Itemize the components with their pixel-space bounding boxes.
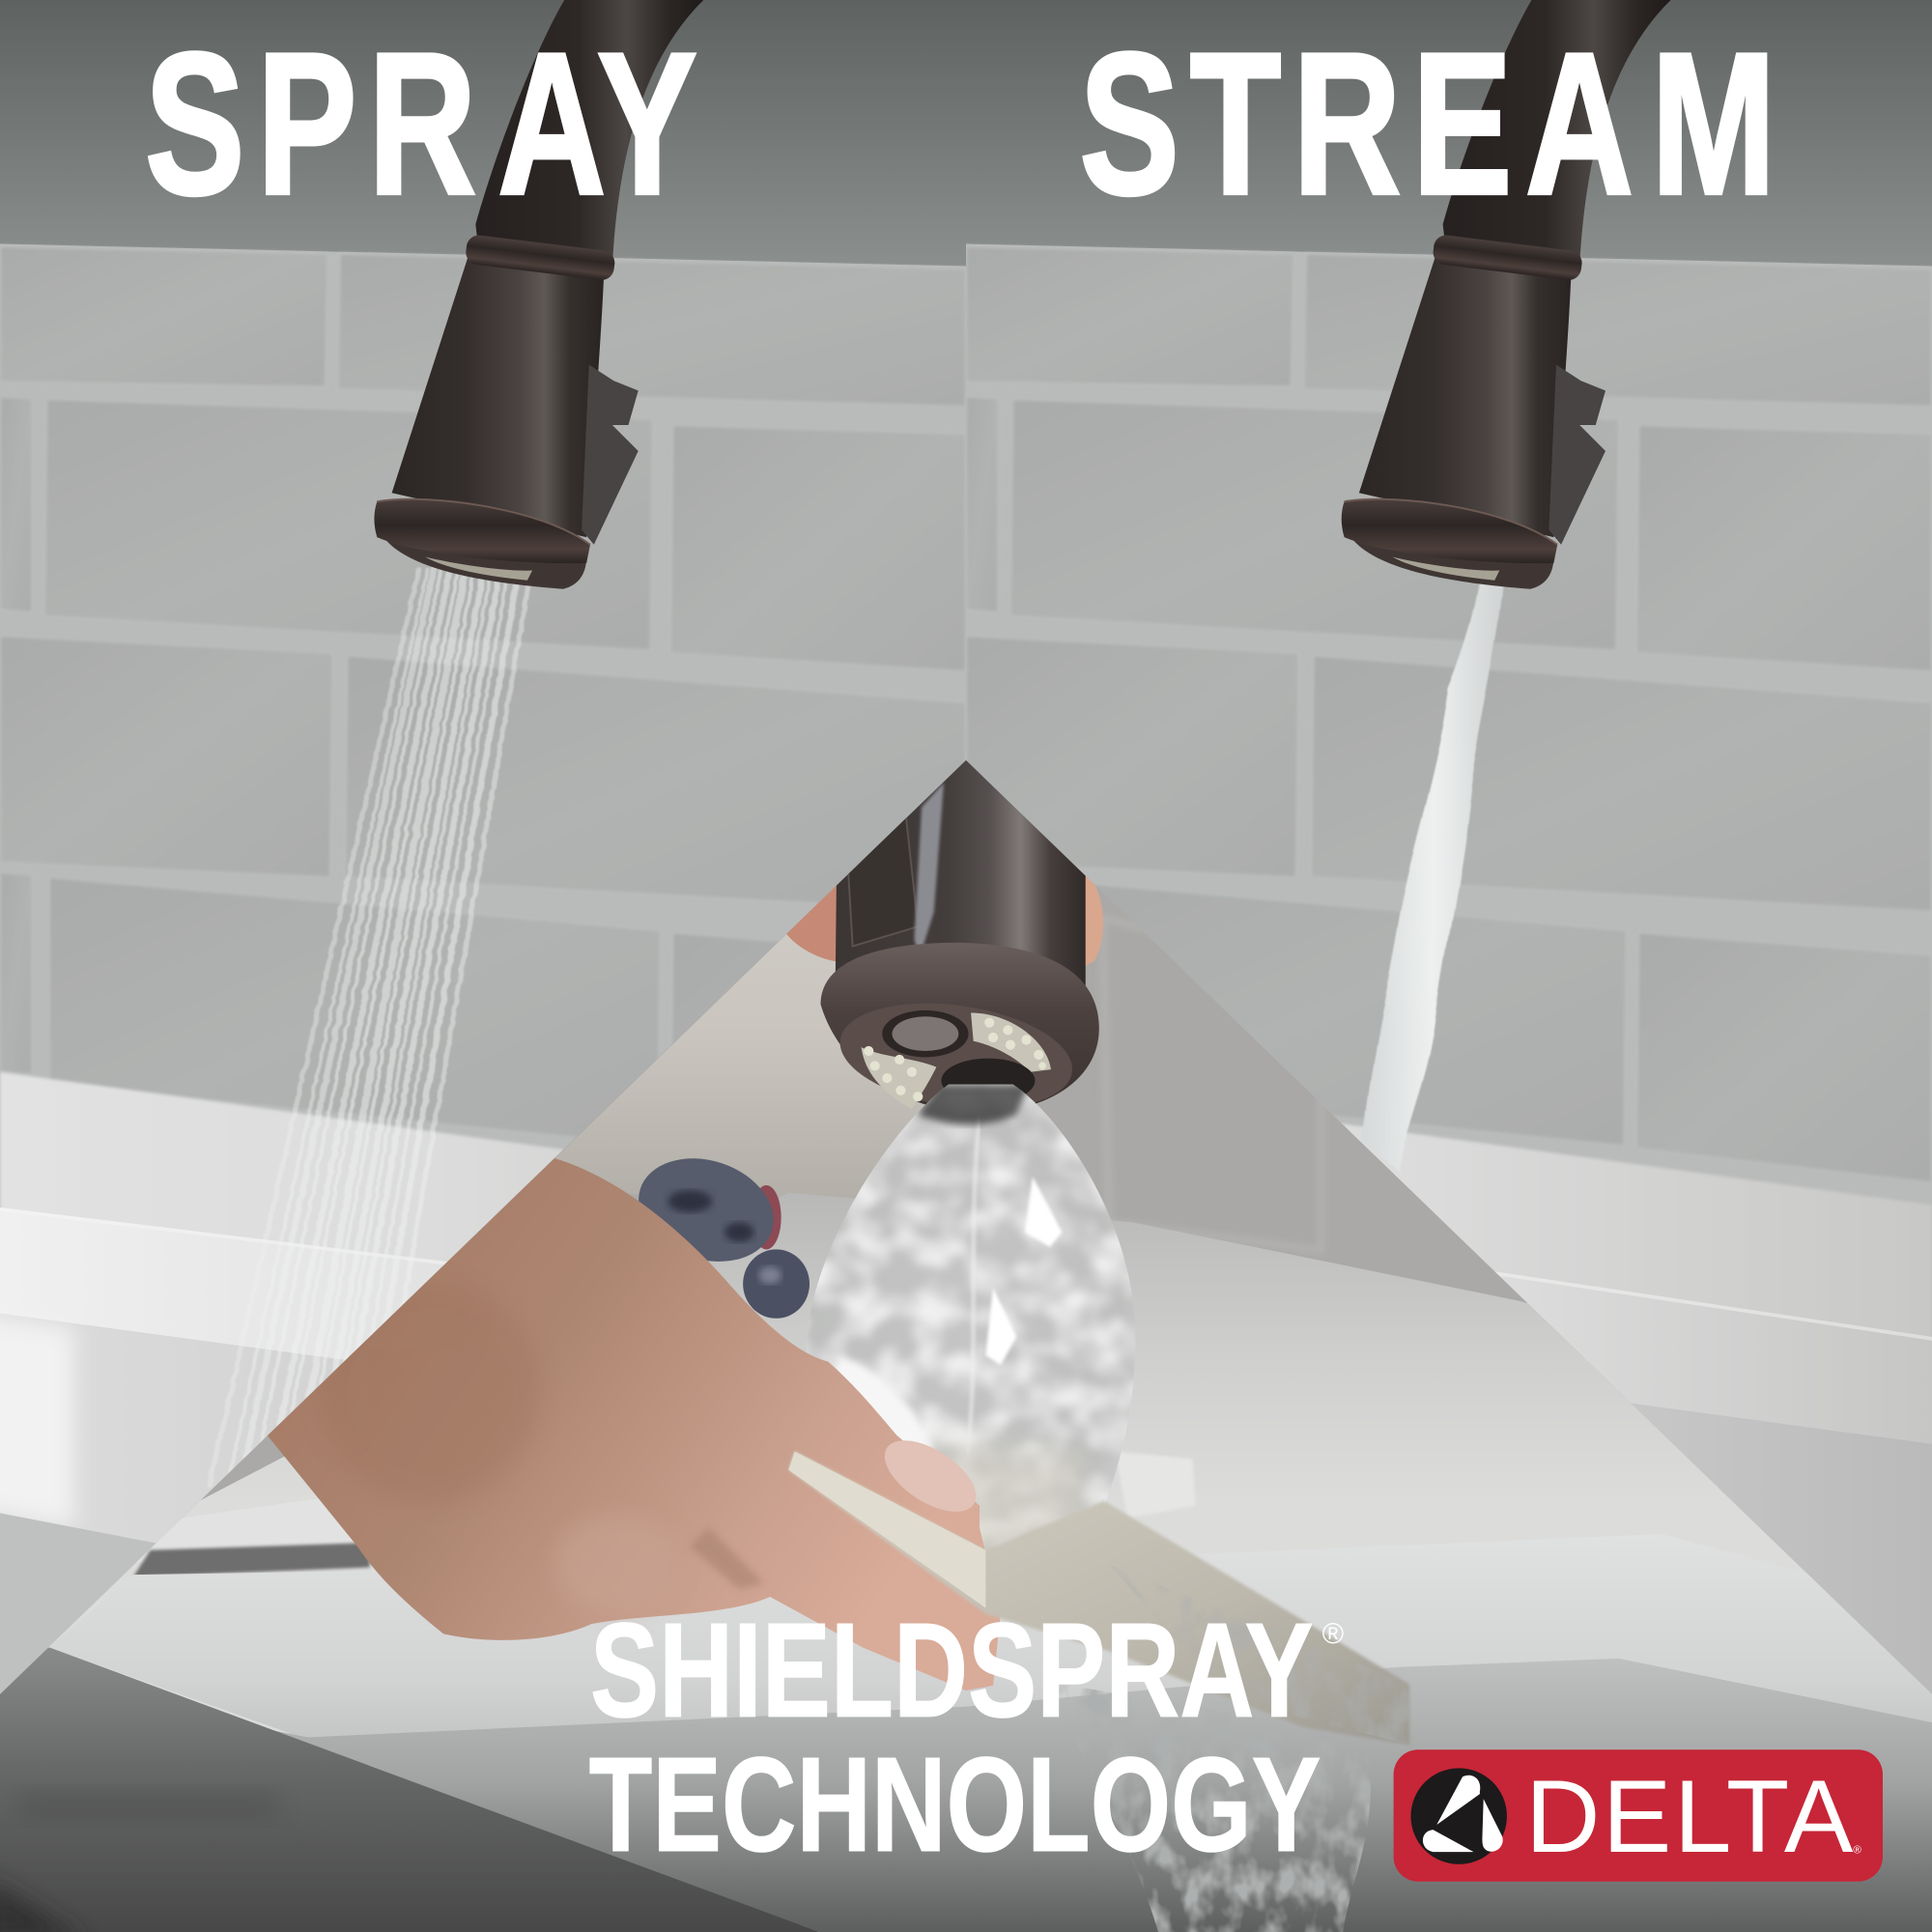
backdrop: beige wall xyxy=(555,934,925,1198)
water running off plate xyxy=(1047,1682,1371,1932)
thumb behind faucet xyxy=(1080,869,1103,966)
faucet head: spray xyxy=(374,0,703,589)
counter surface xyxy=(0,1193,1932,1932)
sink interior xyxy=(246,1659,1932,1932)
title: SPRAY: SPRAY xyxy=(145,10,696,237)
faucet body xyxy=(836,752,1086,985)
wordmark: DELTA xyxy=(1525,1758,1854,1874)
slab shadow xyxy=(133,1543,370,1577)
panel: stream mode xyxy=(966,0,1932,1694)
spray water jets xyxy=(210,569,528,1485)
heading: ShieldSpray Technology: SHIELDSPRAY xyxy=(590,1596,1314,1746)
marble block xyxy=(1115,1452,1195,1518)
faucet button xyxy=(848,813,918,947)
faucet head ring xyxy=(820,943,1099,1113)
water bulb xyxy=(810,1084,1134,1549)
faucet head: stream xyxy=(1342,0,1671,589)
fingernail xyxy=(872,1426,988,1526)
panel: spray mode xyxy=(0,0,966,1694)
aerator xyxy=(882,1010,969,1057)
water outlet xyxy=(941,1059,1036,1094)
water over plate end xyxy=(1109,1565,1409,1745)
sink rim xyxy=(83,1573,1932,1737)
plate being rinsed xyxy=(788,1452,1409,1745)
title: STREAM: STREAM xyxy=(1080,10,1776,237)
dark countertop xyxy=(0,1647,819,1932)
stream of water xyxy=(1361,569,1506,1171)
heading: ShieldSpray Technology: ® xyxy=(1322,1618,1345,1651)
blueberries xyxy=(639,1158,810,1319)
marble slab left xyxy=(136,1519,182,1563)
backdrop: tile wall xyxy=(1103,918,1321,1251)
hand xyxy=(268,1158,1001,1690)
logo: Delta: ® xyxy=(1853,1844,1861,1856)
logo: Delta xyxy=(1394,1749,1883,1882)
faucet groove highlight xyxy=(914,782,944,958)
heading: ShieldSpray Technology: TECHNOLOGY xyxy=(589,1730,1321,1880)
icon: delta triangle mark xyxy=(1410,1768,1507,1864)
panel: ShieldSpray center xyxy=(0,739,1932,1932)
heading: ShieldSpray Technology xyxy=(589,1596,1345,1880)
faucet face xyxy=(840,1004,1072,1102)
nozzle cluster right xyxy=(971,1012,1051,1072)
nozzle cluster left xyxy=(862,1046,936,1109)
finger behind faucet xyxy=(786,883,839,962)
